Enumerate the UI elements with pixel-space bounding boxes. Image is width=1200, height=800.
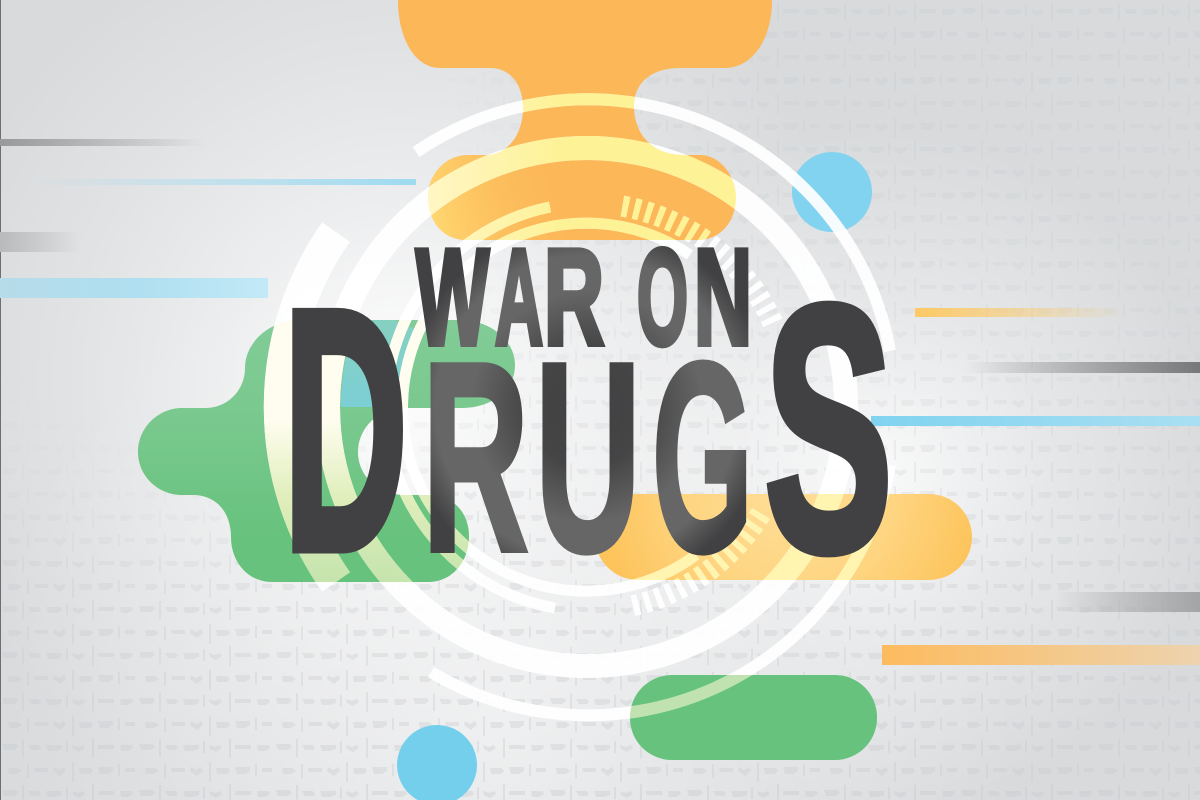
streak bars left and right <box>0 139 1200 665</box>
green pill <box>630 675 877 760</box>
title: WAR ON: O <box>637 221 688 373</box>
title: WAR ON: W <box>416 221 489 373</box>
arcs tinted over green shape <box>264 320 469 582</box>
orange capsule shape <box>398 0 772 240</box>
arcs tinted over green pill <box>630 675 752 718</box>
green capsule shape <box>138 318 515 582</box>
blue circle upper right <box>792 152 872 232</box>
concentric target arcs <box>281 99 890 715</box>
title: WAR ON: R <box>544 221 604 373</box>
title: DRUGS: U <box>535 308 641 608</box>
title: WAR ON: A <box>495 221 543 373</box>
title: DRUGS: D <box>283 238 408 622</box>
blue circle bottom <box>397 725 477 800</box>
arcs tinted over yellow pill <box>632 494 890 580</box>
title: DRUGS: G <box>652 308 753 608</box>
arcs tinted over orange shape <box>428 93 736 240</box>
title: DRUGS: R <box>422 308 529 608</box>
title: DRUGS: S <box>764 234 893 624</box>
title: WAR ON: N <box>694 221 752 373</box>
yellow pill <box>595 494 972 580</box>
